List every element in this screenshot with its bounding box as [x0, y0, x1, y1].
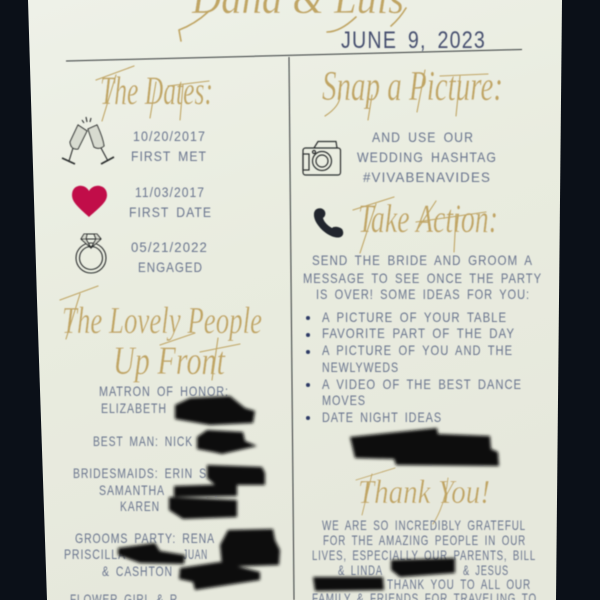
- names: bridesmaids: SAMANTHA: [99, 482, 165, 498]
- icon: camera: [303, 142, 340, 175]
- date: first date: 11/03/2017: [135, 184, 205, 200]
- panel: snap a picture: [303, 64, 503, 185]
- heading: Thank You: Thank You!: [358, 474, 490, 511]
- heading: The Dates: The Dates:: [100, 68, 213, 113]
- text: instructions: SEND THE BRIDE AND GROOM A: [312, 252, 533, 268]
- bullet list: NEWLYWEDS: [322, 359, 399, 375]
- date: engaged: [131, 239, 208, 275]
- text: hashtag: WEDDING HASHTAG: [357, 149, 497, 165]
- heading: The Dates: [96, 66, 213, 121]
- panel: the dates: [62, 66, 213, 275]
- heading: Take Action: Take Action:: [358, 196, 498, 241]
- names: best man: BEST MAN: NICK: [93, 433, 193, 449]
- names: grooms party: PRISCILLA: [64, 546, 126, 562]
- heading: Thank You: [356, 468, 490, 524]
- text: hashtag: AND USE OUR: [372, 129, 474, 145]
- names: bridesmaids: BRIDESMAIDS: ERIN S: [73, 465, 207, 481]
- panel: thank you: [312, 468, 537, 600]
- date: engaged: 05/21/2022: [131, 239, 208, 255]
- wedding date: JUNE 9, 2023: [341, 27, 486, 54]
- text: instructions: [303, 252, 542, 302]
- date: first met: [131, 128, 207, 164]
- names: grooms party: GROOMS PARTY: RENA: [75, 530, 215, 546]
- text: thank you message: THANK YOU TO ALL OUR: [387, 576, 531, 592]
- text: thank you message: [312, 517, 537, 600]
- icon: diamond ring: [76, 234, 106, 273]
- text: hashtag: #VIVABENAVIDES: [363, 169, 491, 185]
- icon: heart: [72, 186, 107, 217]
- names: matron of honor: ELIZABETH: [101, 400, 167, 416]
- panel: the lovely people: [60, 286, 262, 600]
- names: bridesmaids: [73, 465, 207, 514]
- bullet list: FAVORITE PART OF THE DAY: [322, 325, 515, 341]
- text: thank you message: & LINDA: [338, 562, 383, 578]
- icon: phone: [314, 208, 343, 238]
- bullet list: [306, 309, 522, 425]
- heading: The Lovely People Up Front: [60, 286, 262, 383]
- names: grooms party: [64, 530, 215, 579]
- panel: take action: [303, 196, 542, 425]
- heading: Snap a Picture: Snap a Picture:: [322, 64, 503, 110]
- names: grooms party: JUAN: [183, 546, 208, 562]
- text: hashtag: [357, 129, 497, 185]
- date: engaged: ENGAGED: [138, 259, 203, 275]
- icon: champagne glasses: [62, 117, 114, 164]
- heading: Take Action: [353, 196, 498, 253]
- bullet list: MOVES: [322, 392, 366, 408]
- date: first met: 10/20/2017: [133, 128, 206, 144]
- date: first met: FIRST MET: [131, 148, 207, 164]
- names: grooms party: & CASHTON: [102, 563, 173, 579]
- heading: The Lovely People Up Front: The Lovely People: [62, 300, 262, 342]
- heading: Snap a Picture: [322, 64, 503, 120]
- bullet list: DATE NIGHT IDEAS: [322, 409, 442, 425]
- date: first date: [129, 184, 212, 220]
- title: couple names: [179, 0, 406, 41]
- column divider: [289, 57, 294, 600]
- text: thank you message: & JESUS: [463, 562, 509, 578]
- text: instructions: MESSAGE TO SEE ONCE THE PARTY: [303, 270, 542, 286]
- bullet list: A VIDEO OF THE BEST DANCE: [322, 376, 522, 392]
- names: matron of honor: MATRON OF HONOR:: [99, 383, 229, 399]
- date: first date: FIRST DATE: [129, 204, 212, 220]
- names: matron of honor: [99, 383, 229, 416]
- bullet list: A PICTURE OF YOUR TABLE: [322, 309, 507, 325]
- redaction marks: [118, 396, 499, 591]
- names: bridesmaids: KAREN: [120, 498, 160, 514]
- heading: The Lovely People Up Front: Up Front: [113, 338, 226, 383]
- bullet list: A PICTURE OF YOU AND THE: [322, 342, 513, 358]
- horizontal rule: [66, 50, 522, 61]
- text: instructions: IS OVER! SOME IDEAS FOR YOU:: [316, 286, 530, 302]
